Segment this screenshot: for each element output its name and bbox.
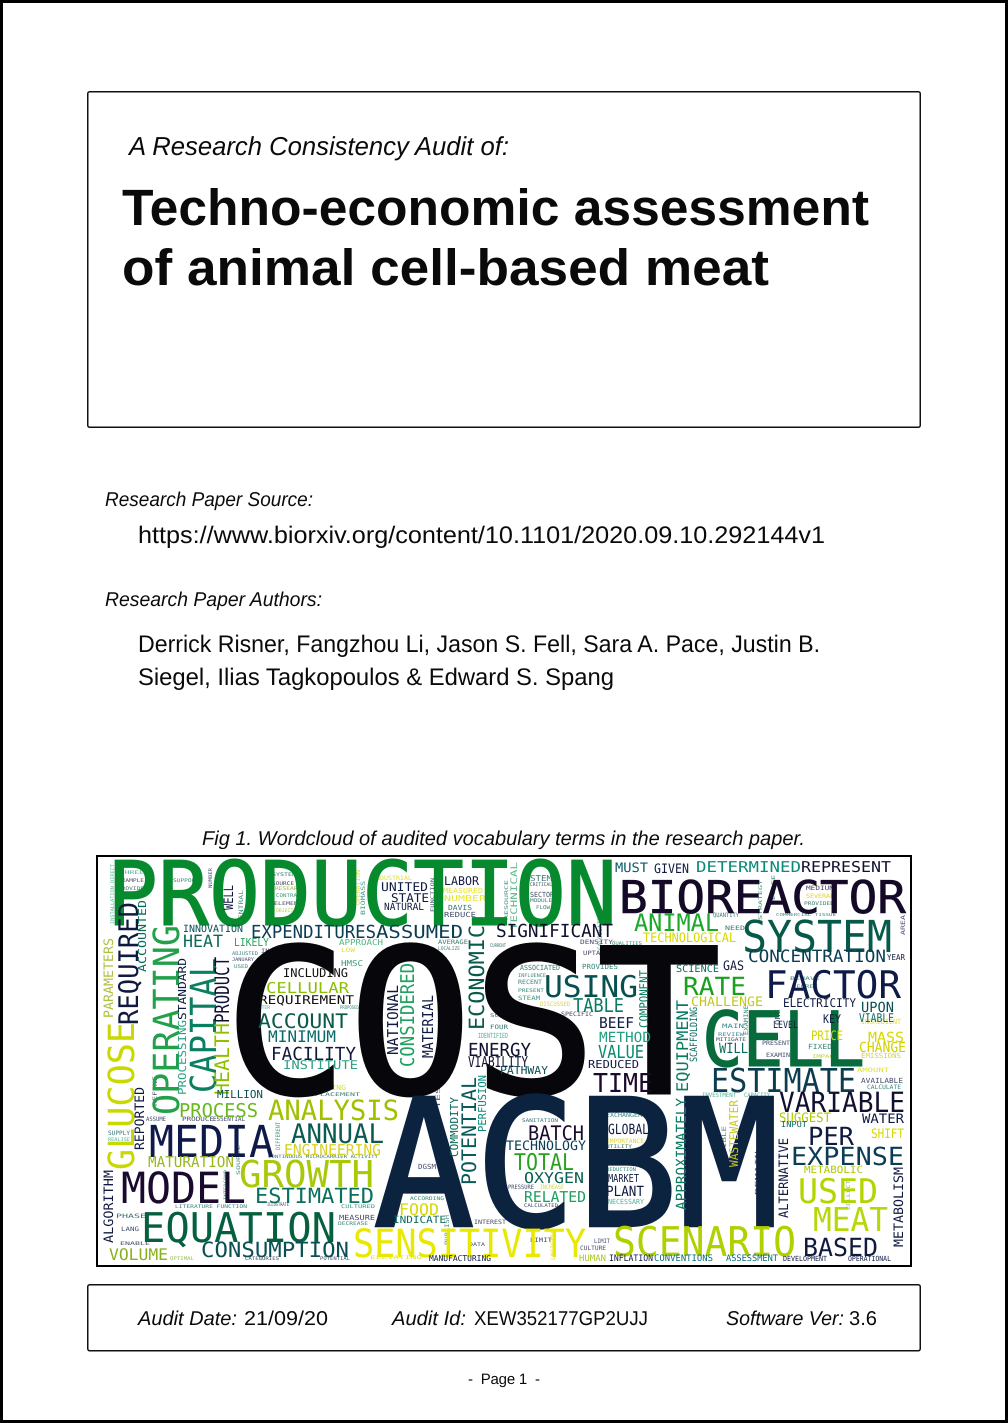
vertical tiny words: DEGREE <box>771 875 777 905</box>
tiny words texture: REVIEW <box>718 1032 745 1038</box>
vertical tiny words: TECHNICAL <box>510 862 520 930</box>
medium words: REDUCED <box>588 1058 639 1071</box>
vertical tiny words: EXAMINE <box>743 1005 750 1035</box>
vertical words: PRODUCT <box>210 957 234 1023</box>
medium words: MINIMUM <box>268 1027 336 1046</box>
medium words: CHANGE <box>859 1040 906 1056</box>
vertical tiny words: AREA <box>900 914 907 935</box>
vertical words: CONSIDERED <box>397 963 419 1067</box>
large words: ANNUAL <box>291 1119 384 1150</box>
figure caption: Fig 1. Wordcloud of audited vocabulary terms in the research paper. <box>202 828 805 850</box>
vertical tiny words: INTERCOMP <box>223 1170 230 1200</box>
source url: https://www.biorxiv.org/content/10.1101/2020.09.10.292144v1 <box>138 522 825 549</box>
large words: VARIABLE <box>779 1086 905 1119</box>
tiny words texture: DISCUSSED <box>540 1001 570 1008</box>
tiny words texture: PRODUCE <box>182 1116 214 1123</box>
medium words: SHIFT <box>871 1127 904 1142</box>
tiny words texture: REDUCTION <box>606 1167 636 1173</box>
medium words: ENERGY <box>468 1040 531 1061</box>
tiny words texture: IMPACT <box>812 1054 838 1060</box>
medium words: CONVENTIONS <box>654 1254 713 1264</box>
medium words: NATURAL <box>384 902 424 913</box>
tiny words texture: DECREASE <box>338 1221 368 1227</box>
tiny words texture: APPROACH <box>339 938 383 947</box>
tiny words texture: DISPLACEMENT <box>300 1092 360 1098</box>
audit id: Audit Id: <box>391 1308 466 1330</box>
tiny words texture: PRESENT <box>518 988 544 994</box>
tiny words texture: LIMIT <box>594 1238 610 1245</box>
tiny words texture: MAIN <box>722 1023 745 1030</box>
tiny words texture: JANUARY <box>232 957 254 963</box>
authors list: Derrick Risner, Fangzhou Li, Jason S. Fell, Sara A. Pace, Justin B. <box>138 631 820 658</box>
tiny words texture: MAY <box>400 1186 428 1194</box>
large words <box>121 909 905 1267</box>
vertical tiny words: FUNCTION <box>430 878 436 912</box>
tiny words texture: DATA <box>469 1242 485 1248</box>
medium words: UPON <box>861 1000 894 1016</box>
tiny words texture: MEASURED <box>443 887 483 895</box>
medium words: CELLULAR <box>266 979 350 997</box>
vertical words: WELL <box>222 885 237 910</box>
tiny words texture: POTENTIAL <box>320 1256 350 1262</box>
vertical tiny words: NUTRIENT <box>248 886 254 912</box>
medium words: SCIENCE <box>676 964 719 975</box>
medium words: VALUE <box>598 1042 644 1063</box>
vertical tiny words: OPERATION <box>355 870 362 905</box>
large words: TABLE <box>573 995 624 1017</box>
tiny words texture: ELEMENT <box>274 901 302 907</box>
medium words: METHOD <box>599 1030 651 1046</box>
medium words: VOLUME <box>109 1245 168 1264</box>
medium words: BEEF <box>599 1014 634 1032</box>
tiny words texture: INVESTMENT <box>702 1092 736 1099</box>
vertical words: NATIONAL <box>384 985 402 1055</box>
medium words: SUGGEST <box>779 1111 831 1126</box>
word: CELL: CELL <box>702 995 865 1084</box>
tiny words texture: RESEARCH <box>275 886 305 892</box>
tiny words texture: ILLUSTRATE <box>267 1202 289 1208</box>
vertical words: APPROXIMATELY <box>674 1097 690 1210</box>
tiny words texture: PROPOSED PRESENCE <box>340 1005 380 1011</box>
software version: 3.6 <box>849 1308 877 1330</box>
vertical tiny words: SOURCE <box>236 1145 242 1175</box>
tiny words texture: ENTER <box>256 1005 271 1011</box>
tiny words texture: INGREDIENT <box>861 1018 902 1026</box>
medium words: KEY <box>823 1012 842 1026</box>
tiny words texture: INDUSTRIAL <box>372 875 412 882</box>
vertical tiny words: STRATEGY <box>758 880 764 920</box>
tiny words texture: LOCALIZE <box>438 946 460 952</box>
vertical words: ALTERNATIVE <box>777 1138 792 1218</box>
tiny words texture: USED <box>234 964 248 970</box>
vertical words: PROCESSING <box>176 1020 189 1095</box>
medium words: DETERMINED <box>696 858 801 876</box>
title: of animal cell-based meat <box>122 239 769 296</box>
tiny words texture: CALCULATED <box>524 1203 558 1209</box>
authors list <box>138 631 820 691</box>
medium words: BATCH <box>528 1121 584 1145</box>
medium words: LEVEL <box>773 1020 798 1031</box>
vertical words: WASTEWATER <box>727 1099 741 1167</box>
tiny words texture: ACCORDING <box>410 1196 444 1202</box>
vertical words: EQUIPMENT <box>673 1000 692 1092</box>
tiny words texture: THREE <box>120 870 144 876</box>
tiny words texture: EXCHANGER <box>606 1112 642 1119</box>
large words: PROCESS <box>179 1100 258 1122</box>
vertical tiny words: PUBLISH <box>444 1215 451 1245</box>
tiny words texture: STEM <box>530 874 552 883</box>
tiny words texture: MEASURE <box>339 1214 375 1222</box>
medium words: STATE <box>391 891 429 905</box>
tiny words texture: PHASE <box>116 1213 147 1220</box>
medium words <box>109 858 906 1264</box>
large words: BASED <box>803 1233 878 1262</box>
medium words: INPUT <box>781 1120 807 1129</box>
tiny words texture: INTEREST <box>474 1219 506 1226</box>
authors label: Research Paper Authors: <box>105 589 322 611</box>
tiny words texture: SOURCE <box>272 881 294 887</box>
vertical words: COMPONENT <box>637 970 651 1028</box>
tiny words texture: INCREASE <box>540 1184 564 1191</box>
vertical words: POTENTIAL <box>457 1077 481 1185</box>
word: PRODUCTION: PRODUCTION <box>107 842 617 946</box>
chart: wordcloud <box>97 842 911 1268</box>
authors list: Siegel, Ilias Tagkopoulos & Edward S. Spang <box>138 664 614 691</box>
tiny words texture: REALISE <box>108 1137 130 1143</box>
tiny words texture: SECTOR <box>530 891 555 899</box>
tiny words texture: MODULE <box>530 898 552 904</box>
vertical tiny words: REMAIN <box>754 1151 762 1195</box>
medium words: ACCOUNT <box>258 1009 348 1033</box>
large words: USING <box>544 970 638 1005</box>
vertical tiny words: DIFFERENT <box>275 1122 282 1150</box>
tiny words texture: REDUCE <box>444 911 476 919</box>
medium words: METABOLIC <box>804 1165 863 1176</box>
vertical words: GLUCOSE <box>102 1022 143 1170</box>
medium words: LIKELY <box>234 936 269 949</box>
tiny words texture: TREATMENT <box>606 1150 636 1156</box>
tiny words texture: PRESSURE <box>508 1184 534 1191</box>
tiny words texture: PROVIDE <box>118 886 144 892</box>
vertical tiny words: CALCULATION <box>597 910 604 950</box>
tiny words texture: CAPACITY <box>744 1092 770 1099</box>
tiny words texture: ASSUME <box>146 1116 166 1123</box>
tiny words texture: SANITATION <box>522 1118 558 1124</box>
tiny words texture: SYSTEM <box>272 872 296 878</box>
subtitle: A Research Consistency Audit of: <box>127 131 509 161</box>
vertical words: CAPITAL <box>184 958 225 1093</box>
medium words: INDICATE <box>393 1215 446 1226</box>
medium words: UNITED <box>381 880 428 894</box>
vertical tiny words: COLLECT <box>846 1180 852 1210</box>
vertical tiny words: INSTALLATION DIRECT <box>110 864 116 924</box>
vertical words: OPERATING <box>147 925 188 1115</box>
tiny words texture: COMMERCIAL TISSUE <box>776 912 837 917</box>
vertical words: COMMODITY <box>448 1097 461 1157</box>
vertical tiny words: CENTRAL <box>238 889 245 924</box>
medium words: ENGINEERING <box>284 1141 381 1159</box>
tiny words texture: NEED <box>725 925 746 932</box>
audit id <box>391 1308 648 1330</box>
medium words: PLANT <box>606 1184 645 1200</box>
tiny words texture: SEVERAL <box>806 893 834 900</box>
tiny words texture: MEDIUM <box>806 885 834 892</box>
vertical words: SCAFFOLDING <box>689 1007 700 1062</box>
medium words: MASS <box>868 1030 904 1046</box>
tiny words texture: ENABLE <box>120 1241 150 1247</box>
tiny words texture: FOUR <box>490 1024 508 1031</box>
tiny words texture: CULTURE <box>580 1245 606 1252</box>
tiny words texture: AMOUNT <box>857 1067 890 1074</box>
medium words: RELATED <box>524 1188 586 1206</box>
tiny words texture: OBJECTIVE <box>276 908 302 914</box>
medium words: INFLATION <box>609 1254 653 1264</box>
medium words: PATHWAY <box>500 1064 548 1077</box>
medium words: PRICE <box>811 1029 843 1044</box>
large words: MODEL <box>121 1164 246 1214</box>
vertical tiny words: TEST <box>435 1079 442 1108</box>
large words: ESTIMATED <box>255 1184 374 1208</box>
medium words: LABOR <box>444 874 480 888</box>
vertical words: ALGORITHM <box>102 1170 117 1243</box>
large words: EXPENDITURES <box>251 922 376 943</box>
medium words: WILL <box>719 1041 748 1057</box>
medium words: MANUFACTURING <box>429 1254 491 1263</box>
vertical words: STANDARD <box>176 958 189 1020</box>
large words: MEAT <box>813 1200 888 1239</box>
medium words: VIABLE <box>859 1011 894 1025</box>
large words: ANALYSIS <box>268 1094 399 1127</box>
medium words: OPERATIONAL <box>848 1255 891 1263</box>
medium words: MILLION <box>217 1088 263 1101</box>
tiny words texture: DEGREE <box>792 984 818 990</box>
medium words: TECHNOLOGY <box>506 1139 586 1154</box>
vertical words: REQUIRED <box>114 902 145 1025</box>
tiny words texture: FIXED <box>808 1043 832 1051</box>
tiny words texture: PROVIDES <box>582 963 618 971</box>
medium words: ELECTRICITY <box>783 996 857 1010</box>
tiny words texture: MANY <box>270 864 292 870</box>
large words: ASSUMED <box>376 922 463 943</box>
tiny words texture: EMISSIONS <box>861 1052 901 1060</box>
vertical tiny words: NUMBER <box>208 867 214 888</box>
audit id: XEW352177GP2UJJ <box>474 1308 648 1330</box>
tiny words texture: AVERAGE <box>438 939 468 946</box>
large words: RATE <box>683 972 746 1001</box>
tiny words texture: AVAILABLE <box>861 1077 903 1085</box>
large words: GROWTH <box>239 1153 374 1196</box>
medium words: TOTAL <box>514 1150 574 1176</box>
vertical tiny words: ONE <box>774 1009 782 1025</box>
tiny words texture: ESSENTIAL <box>213 1116 245 1123</box>
medium words: GAS <box>723 959 744 974</box>
medium words: GLOBAL <box>608 1122 649 1138</box>
audit date: 21/09/20 <box>244 1308 328 1330</box>
medium words: INNOVATION <box>183 924 243 935</box>
tiny words texture: SUPPLY <box>108 1130 130 1137</box>
medium words: MARKET <box>608 1172 639 1185</box>
medium words: REPRESENT <box>801 858 891 876</box>
tiny words texture: DAVIS <box>448 904 472 912</box>
panel: title box <box>88 92 920 427</box>
tiny words texture: IDENTIFIED <box>478 1032 508 1040</box>
large words: PER <box>808 1122 855 1151</box>
tiny words texture: LITERATURE FUNCTION <box>175 1204 247 1210</box>
large words: TIME <box>593 1069 653 1099</box>
tiny words texture: CURRENT <box>490 943 506 949</box>
vertical tiny words: REFINE <box>152 1075 159 1106</box>
source label: Research Paper Source: <box>105 489 313 511</box>
panel: audit footer <box>88 1285 920 1351</box>
dominant words <box>107 842 907 1268</box>
word: ACBM: ACBM <box>373 1062 780 1268</box>
vertical words: METABOLISM <box>892 1167 907 1247</box>
tiny words texture: PROVIDED <box>804 901 834 907</box>
large words: CONCENTRATION <box>748 947 886 967</box>
tiny words texture: PRESENTED <box>762 1040 798 1047</box>
tiny words texture: LOW <box>341 947 355 954</box>
tiny words texture: CRITICAL <box>530 882 552 888</box>
tiny words texture: INFLUENCE <box>518 973 546 979</box>
medium words: INSTITUTE <box>283 1058 358 1072</box>
tiny words texture: QUALITIES <box>612 941 642 947</box>
vertical words: ACCOUNTED <box>136 900 149 972</box>
tiny words texture: IMPORTANCE <box>606 1138 644 1145</box>
large words: FACTOR <box>765 963 901 1007</box>
medium words: FACILITY <box>271 1044 356 1065</box>
tiny words texture: HMSC <box>341 959 363 968</box>
vertical tiny words: RESOURCE <box>504 880 510 920</box>
tiny words texture: ADJUSTED <box>232 951 258 957</box>
large words: SIGNIFICANT <box>496 921 613 942</box>
medium words: WATER <box>862 1112 904 1127</box>
title: Techno-economic assessment <box>122 179 869 236</box>
tiny words texture: UPTAKE <box>583 950 609 957</box>
medium words: CHALLENGE <box>691 995 763 1010</box>
tiny words texture: SUPPORT <box>173 878 199 884</box>
word: BIOREACTOR: BIOREACTOR <box>619 871 907 924</box>
tiny words texture: LANG <box>121 1226 139 1233</box>
tiny words texture: COOLING <box>312 1084 346 1092</box>
vertical tiny words: LOGISTIC <box>550 1230 557 1260</box>
tiny words texture: RECENT <box>518 979 542 986</box>
tiny words texture: FLOW <box>536 905 551 911</box>
tiny words texture: DENSITY <box>580 939 613 946</box>
tiny words texture: CONTINUOUS MICROCARRIER ACTIVITY <box>268 1154 378 1160</box>
tiny words texture: OPTIMAL <box>170 1256 194 1262</box>
large words: SYSTEM <box>742 912 892 963</box>
title <box>122 179 869 296</box>
tiny words texture: NECESSARY <box>608 1198 645 1206</box>
medium words: REQUIREMENT <box>259 993 354 1007</box>
tiny words texture: BEHAVE <box>790 976 820 982</box>
tiny words texture: ELEVATING <box>370 1255 422 1261</box>
tiny words texture: CALCULATE <box>867 1084 901 1091</box>
tiny words texture: QUANTITY <box>713 912 739 919</box>
vertical words: REPORTED <box>133 1087 148 1150</box>
medium words: VIABILITY <box>468 1053 528 1071</box>
vertical words: MATERIAL <box>419 995 437 1058</box>
tiny words texture: MITIGATE <box>716 1037 746 1043</box>
medium words: DEVELOPMENT <box>783 1255 828 1263</box>
large words: EXPENSE <box>791 1142 904 1171</box>
large words: USED <box>798 1172 878 1212</box>
vertical words: HEALTH <box>210 1023 234 1095</box>
tiny words texture: ASSOCIATED <box>520 964 560 972</box>
large words: MEDIA <box>149 1117 274 1168</box>
large words: ANIMAL <box>634 909 719 937</box>
tiny words texture: CONTRACT <box>276 893 304 899</box>
medium words: INCLUDING <box>283 966 348 980</box>
tiny words texture: NUMBER <box>444 894 486 903</box>
tiny words texture: STEAM <box>518 995 540 1002</box>
word: COST: COST <box>224 907 721 1141</box>
vertical words: PARAMETERS <box>102 938 117 1018</box>
large words: EQUATION <box>141 1204 336 1252</box>
medium words: HUMAN <box>579 1254 606 1264</box>
tiny words texture: EXAMINED <box>766 1052 798 1059</box>
tiny words texture: EXAMPLE <box>118 878 144 884</box>
medium words: YEAR <box>887 953 905 962</box>
software version: Software Ver: <box>726 1308 844 1330</box>
vertical words <box>102 885 907 1247</box>
vertical words: PERFUSION <box>476 1075 489 1132</box>
tiny words texture: CULTURED <box>341 1204 375 1210</box>
tiny words texture: DGSM <box>418 1163 436 1171</box>
tiny words texture: LIMIT <box>530 1237 552 1244</box>
tiny words texture: SPECIFIC <box>561 1011 593 1018</box>
audit date <box>137 1308 328 1330</box>
medium words: MATURATION <box>148 1153 234 1171</box>
vertical tiny words: FEASIBLE <box>721 1125 728 1170</box>
audit date: Audit Date: <box>137 1308 237 1330</box>
vertical tiny words <box>110 862 907 1260</box>
tiny words texture <box>108 864 903 1262</box>
tiny words texture: CATEGORIES <box>245 1256 279 1262</box>
medium words: FOOD <box>399 1200 439 1219</box>
tiny words texture: INCLUDE <box>261 948 291 955</box>
large words: ESTIMATE <box>711 1061 856 1100</box>
vertical words: ECONOMIC <box>465 925 489 1030</box>
vertical tiny words: BIOMASS <box>360 880 367 915</box>
large words: CONSUMPTION <box>201 1238 349 1262</box>
large words: SCENARIO <box>613 1218 796 1266</box>
large words: SENSITIVITY <box>353 1222 586 1267</box>
medium words: OXYGEN <box>524 1169 584 1187</box>
medium words: MUST <box>615 861 648 876</box>
tiny words texture: SCALE <box>490 1013 512 1019</box>
tiny words texture: UTILITY <box>606 1144 632 1150</box>
medium words: ASSESSMENT <box>726 1254 779 1264</box>
page number: - Page 1 - <box>468 1371 540 1388</box>
medium words: GIVEN <box>654 862 689 877</box>
medium words: HEAT <box>183 932 223 952</box>
large words: TECHNOLOGICAL <box>643 931 736 946</box>
